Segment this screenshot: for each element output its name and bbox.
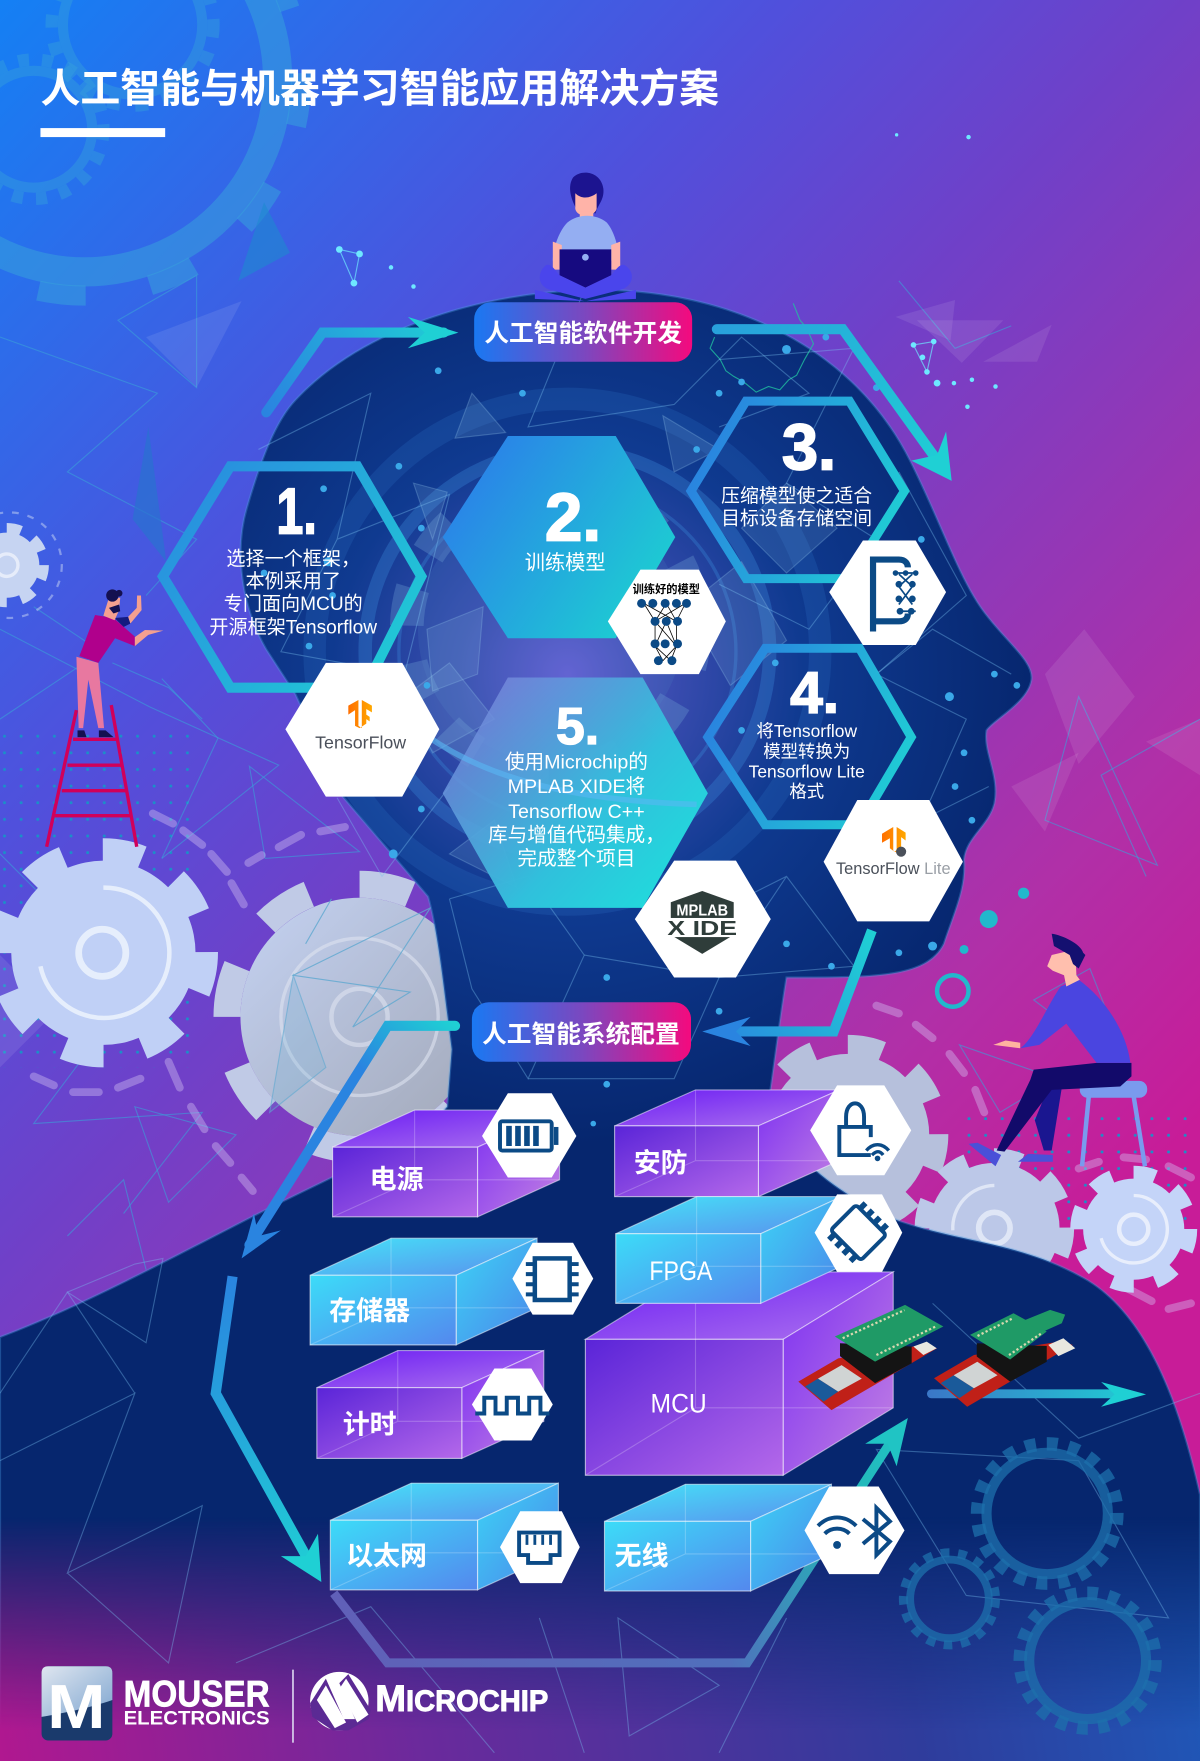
step 3 description: 目标设备存储空间 (721, 508, 872, 529)
cube: memory (310, 1238, 537, 1345)
arrow: software pill to step 3 (717, 329, 952, 481)
bottom colour wash (0, 1529, 1200, 1761)
FPGA label: FPGA (649, 1256, 712, 1286)
pill: AI system configuration (472, 1002, 691, 1062)
arrow: bottom loop to MCU (334, 1418, 908, 1663)
power label: 电源 (370, 1165, 424, 1195)
faint gear inside head (407, 485, 694, 773)
step 4 description: 格式 (789, 782, 824, 802)
step 1 description: 选择一个框架， (226, 548, 360, 570)
development board: left (798, 1305, 943, 1410)
Mouser wordmark: MOUSER (124, 1673, 270, 1715)
blue shard left of the head (133, 427, 166, 562)
compressed network glyph (893, 570, 919, 615)
cube: ethernet (330, 1483, 558, 1590)
step 5: filled hexagon (427, 678, 708, 908)
gear: right pale blue (1078, 1173, 1190, 1285)
logo divider (292, 1670, 294, 1743)
step 4 description: 模型转换为 (763, 741, 850, 761)
icon badge: trained model (608, 570, 726, 674)
step 5 description: 完成整个项目 (517, 848, 635, 870)
step 2 number: 2. (545, 480, 601, 555)
logo: Microchip (310, 1672, 548, 1730)
constellation dots (336, 133, 998, 409)
security label: 安防 (634, 1148, 688, 1178)
TensorFlow logo mark (348, 700, 372, 728)
icon: square wave timer (472, 1369, 553, 1440)
cube: timing (317, 1351, 544, 1458)
circuit gear outline near crown (710, 303, 813, 392)
logo: Mouser Electronics (42, 1666, 270, 1742)
dark gears bottom right (903, 1444, 1155, 1728)
gear: right middle (922, 1156, 1066, 1300)
icon: secure lock (810, 1085, 911, 1175)
icon badge: TensorFlow (285, 663, 439, 797)
icon: battery (482, 1093, 576, 1178)
step 2 description: 训练模型 (525, 552, 606, 575)
step 5 description: MPLAB XIDE将 (508, 776, 645, 798)
light sweep across step 5 (427, 736, 697, 804)
step 5 description: Tensorflow C++ (508, 801, 645, 823)
gear: large pale blue (2, 852, 204, 1054)
step 5 description: 使用Microchip的 (505, 752, 648, 774)
step 5 description: 库与增值代码集成， (488, 825, 665, 847)
icon badge: compressed model clamp (829, 540, 946, 645)
icon: wifi and bluetooth (804, 1487, 904, 1574)
icon badge: MPLAB X IDE (635, 861, 771, 978)
step 3 number: 3. (782, 411, 836, 484)
arrow: down to ethernet (216, 1276, 321, 1582)
TensorFlow Lite wordmark: TensorFlow Lite (836, 859, 951, 878)
icon: FPGA chip (815, 1194, 902, 1272)
clamp glyph (873, 560, 908, 631)
step 4 description: 将Tensorflow (756, 721, 857, 741)
mesh shards inside the head (404, 393, 837, 888)
development board: right (934, 1310, 1075, 1407)
cube: power (333, 1110, 560, 1217)
step 3 description: 压缩模型使之适合 (721, 485, 872, 506)
gear: grey behind head (227, 884, 492, 1149)
icon: memory chip (512, 1243, 593, 1315)
TensorFlow Lite logo mark (882, 827, 906, 853)
network diagram (637, 599, 691, 665)
step 4 description: Tensorflow Lite (749, 762, 865, 782)
step 3: outline hexagon (691, 401, 904, 579)
step 4: outline hexagon (708, 648, 911, 825)
arrow: output to the right (931, 1382, 1146, 1407)
cube: FPGA (616, 1197, 842, 1303)
X IDE text: X IDE (667, 918, 737, 940)
wireless label: 无线 (615, 1541, 669, 1571)
cube: wireless (604, 1484, 831, 1591)
dashed ring left edge (0, 512, 62, 618)
MPLAB shield (671, 891, 734, 954)
Microchip emblem (310, 1672, 371, 1730)
MCU label: MCU (651, 1388, 707, 1418)
TensorFlow wordmark: TensorFlow (315, 732, 407, 752)
person: seated with laptop (535, 173, 636, 301)
background mesh lines (0, 275, 1200, 1270)
cyan accent ring and dots (937, 888, 1029, 1007)
step 2: filled hexagon (443, 436, 675, 638)
concentric rings inside head (315, 399, 820, 904)
memory label: 存储器 (329, 1296, 410, 1326)
soft polygons in the background (0, 300, 1200, 1067)
pill: AI system configuration: 人工智能系统配置 (482, 1021, 680, 1049)
step 1: outline hexagon (163, 466, 421, 688)
step 1 description: 专门面向MCU的 (224, 593, 363, 615)
person: sitting on stool (969, 934, 1147, 1166)
dashed arcs around the gears (34, 813, 1191, 1309)
step 4 number: 4. (790, 660, 839, 725)
step 1 number: 1. (276, 475, 317, 548)
gear: grey right of the neck (758, 1045, 938, 1225)
arrow: step 4 to system pill (702, 930, 872, 1046)
MPLAB text: MPLAB (676, 903, 728, 920)
gears: top-left decorative (0, 0, 301, 296)
gear: left edge (0, 528, 44, 602)
cube: MCU (585, 1272, 893, 1475)
icon: ethernet port (500, 1511, 580, 1583)
Electronics wordmark: ELECTRONICS (124, 1708, 270, 1730)
arrow: system pill down the left (242, 1026, 455, 1258)
step 5 number: 5. (556, 697, 599, 755)
Mouser tile: M (47, 1673, 106, 1742)
person: on ladder (47, 589, 163, 847)
step 1 description: 本例采用了 (246, 571, 341, 593)
icon badge: TensorFlow Lite (824, 800, 963, 921)
cube: security (615, 1090, 839, 1197)
title underline (40, 128, 165, 137)
ethernet label: 以太网 (346, 1541, 427, 1571)
scattered node dots (261, 334, 1020, 1126)
timing label: 计时 (343, 1410, 397, 1440)
trained model caption: 训练好的模型 (633, 582, 700, 596)
step 1 description: 开源框架Tensorflow (209, 617, 377, 639)
title: 人工智能与机器学习智能应用解决方案 (40, 67, 719, 111)
arrow: into software pill (266, 317, 458, 412)
dot grids (0, 730, 1200, 1247)
pill: AI software development: 人工智能软件开发 (484, 320, 682, 348)
Microchip wordmark: MICROCHIP (375, 1677, 548, 1719)
pill: AI software development (474, 302, 692, 362)
Mouser tile (42, 1666, 112, 1742)
